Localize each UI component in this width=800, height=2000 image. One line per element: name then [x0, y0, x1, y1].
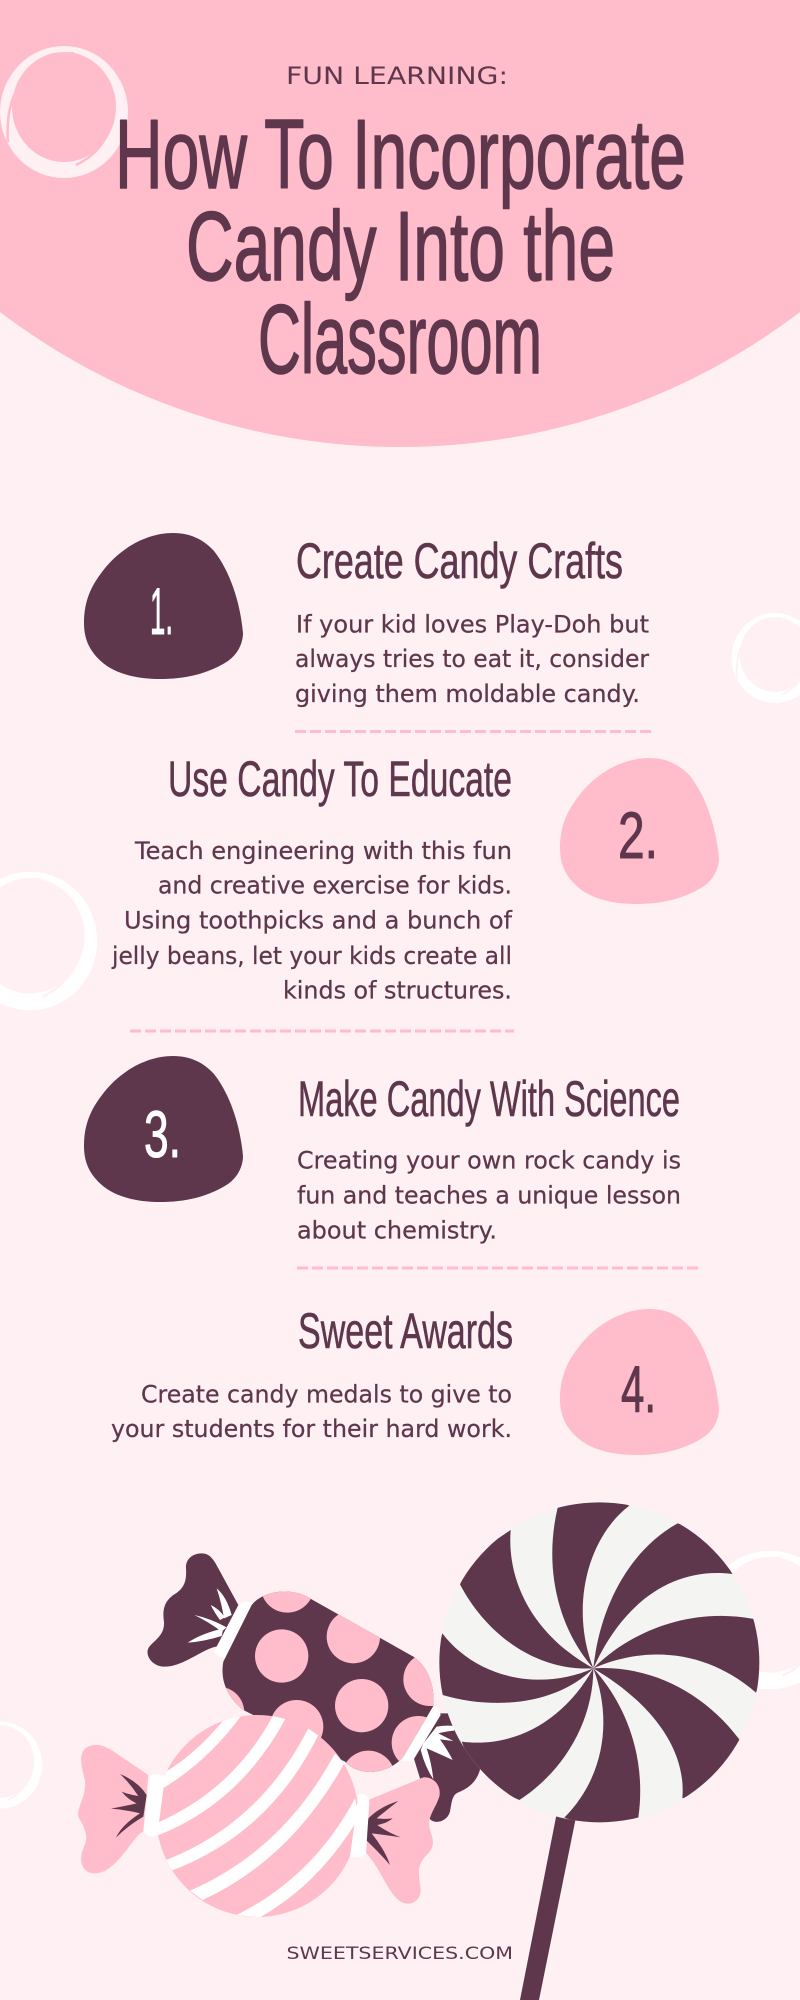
item 2: [111, 751, 719, 1004]
eyebrow: fun learning: FUN LEARNING:: [286, 62, 508, 90]
item 1: 1.: [150, 574, 173, 648]
number blob 1: [84, 533, 243, 679]
scribble circle: right of item 1: [731, 613, 800, 703]
icon: polka dot candy: [147, 1553, 481, 1822]
body text 4: Create candy medals to give to: [141, 1380, 512, 1408]
body text 2: and creative exercise for kids.: [158, 872, 512, 900]
number blob 3: [84, 1056, 243, 1202]
number 4: 4.: [621, 1352, 656, 1426]
number 3: 3.: [144, 1097, 181, 1171]
candy illustration: [78, 1492, 770, 2000]
body text 1: If your kid loves Play-Doh but: [296, 610, 649, 638]
footer: website: SWEETSERVICES.COM: [286, 1944, 513, 1964]
body text 1: always tries to eat it, consider: [295, 645, 649, 673]
body text 2: jelly beans, let your kids create all: [111, 942, 512, 970]
body text 3: fun and teaches a unique lesson: [297, 1182, 681, 1210]
title: [115, 99, 686, 394]
body text 3: Creating your own rock candy is: [297, 1146, 681, 1174]
item 4: [111, 1303, 719, 1455]
body text 2: Teach engineering with this fun: [134, 837, 512, 865]
body text 3: [297, 1146, 681, 1244]
scribble circle: behind lollipop: [703, 1551, 800, 1689]
number blob 2: [560, 758, 719, 904]
body text 2: kinds of structures.: [283, 976, 512, 1004]
scribble circle: header: [0, 46, 128, 178]
body text 2: Using toothpicks and a bunch of: [124, 906, 513, 934]
number 2: 2.: [618, 798, 658, 872]
item 3: [84, 1056, 681, 1244]
number blob 4: [560, 1309, 719, 1455]
title: Classroom: [258, 284, 542, 394]
heading 2: Use Candy To Educate: [168, 751, 512, 807]
header: pink arc: [0, 0, 800, 447]
body text 4: your students for their hard work.: [111, 1415, 512, 1443]
body text 1: giving them moldable candy.: [295, 680, 640, 708]
heading 4: Sweet Awards: [298, 1303, 513, 1359]
body text 4: [111, 1380, 512, 1443]
icon: lollipop: [433, 1492, 770, 2000]
heading 1: Create Candy Crafts: [296, 533, 623, 589]
body text 2: [111, 837, 513, 1004]
scribble circle: left of item 2: [0, 872, 97, 1010]
scribble circle: lower left: [0, 1721, 42, 1809]
icon: striped pink candy: [78, 1715, 440, 1917]
body text 1: [295, 610, 649, 708]
body text 3: about chemistry.: [297, 1216, 497, 1244]
item 1: [84, 533, 649, 708]
